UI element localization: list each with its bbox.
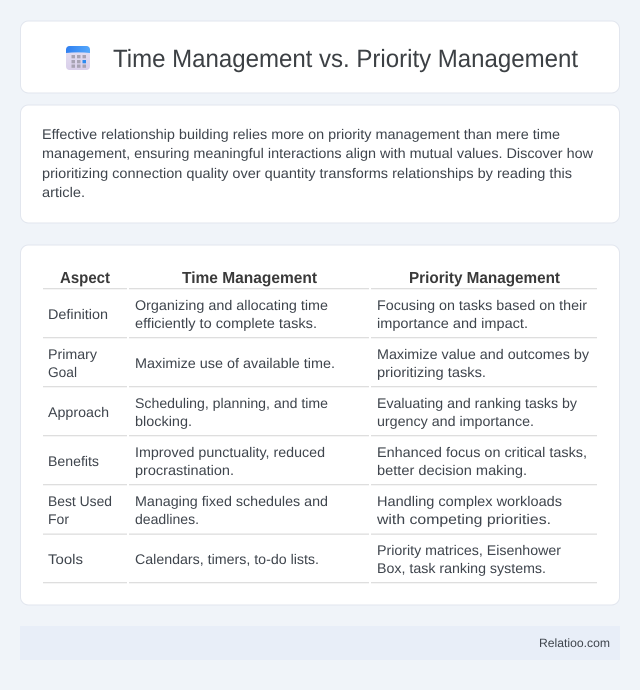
title: Time Management vs. Priority Management xyxy=(113,45,578,73)
row: primary goal: Maximize value and outcomes by xyxy=(377,346,589,362)
row: best used for: deadlines. xyxy=(135,511,199,527)
row: tools: Box, task ranking systems. xyxy=(377,560,546,576)
row: best used for: with competing priorities. xyxy=(376,511,551,527)
text block: introduction: management, ensuring meaningful interactions align with mutual values. Discover how xyxy=(42,145,594,161)
row: definition: Focusing on tasks based on their xyxy=(377,297,587,313)
footer text: Relatioo.com xyxy=(539,636,610,650)
row: approach: Evaluating and ranking tasks by xyxy=(377,395,577,411)
panel: comparison table xyxy=(20,245,620,605)
row: tools xyxy=(48,542,561,576)
row: tools: Calendars, timers, to-do lists. xyxy=(135,551,319,567)
table header xyxy=(60,270,561,287)
text block: introduction: prioritizing connection quality over quantity transforms relationships by reading this xyxy=(42,165,572,181)
row: tools: Priority matrices, Eisenhower xyxy=(377,542,561,558)
row: primary goal: Primary xyxy=(48,346,97,362)
row: definition: efficiently to complete tasks. xyxy=(135,315,317,331)
row: benefits xyxy=(48,444,587,478)
row: approach: urgency and importance. xyxy=(377,413,534,429)
icon: calendar xyxy=(66,46,90,70)
row: definition xyxy=(48,297,587,331)
row: primary goal: Goal xyxy=(48,364,77,380)
text block: introduction: article. xyxy=(42,184,85,200)
row: primary goal xyxy=(48,346,589,380)
row: benefits: Benefits xyxy=(48,453,99,469)
row: best used for: Managing fixed schedules and xyxy=(135,493,328,509)
row: definition: importance and impact. xyxy=(377,315,528,331)
row: primary goal: Maximize use of available time. xyxy=(135,355,335,371)
text block: introduction: Effective relationship building relies more on priority management than mere time xyxy=(42,126,560,142)
table header: Priority Management xyxy=(409,270,561,287)
row: best used for: Handling complex workloads xyxy=(377,493,562,509)
panel: title card xyxy=(20,21,620,93)
row: approach: Scheduling, planning, and time xyxy=(135,395,328,411)
row: best used for: For xyxy=(48,511,69,527)
table header: Aspect xyxy=(60,270,111,287)
row: benefits: procrastination. xyxy=(135,462,234,478)
footer bar xyxy=(20,626,620,660)
row: primary goal: prioritizing tasks. xyxy=(377,364,486,380)
row: benefits: Enhanced focus on critical tasks, xyxy=(377,444,587,460)
row: approach: Approach xyxy=(48,404,109,420)
row: best used for xyxy=(48,493,562,527)
row: benefits: Improved punctuality, reduced xyxy=(135,444,325,460)
row: definition: Organizing and allocating time xyxy=(135,297,328,313)
panel: introduction xyxy=(20,105,620,223)
row: approach xyxy=(48,395,577,429)
row: approach: blocking. xyxy=(135,413,192,429)
row: benefits: better decision making. xyxy=(377,462,527,478)
row: best used for: Best Used xyxy=(48,493,112,509)
row: definition: Definition xyxy=(48,306,108,322)
row: tools: Tools xyxy=(48,551,83,567)
text block: introduction xyxy=(42,126,594,200)
table header: Time Management xyxy=(182,270,318,287)
